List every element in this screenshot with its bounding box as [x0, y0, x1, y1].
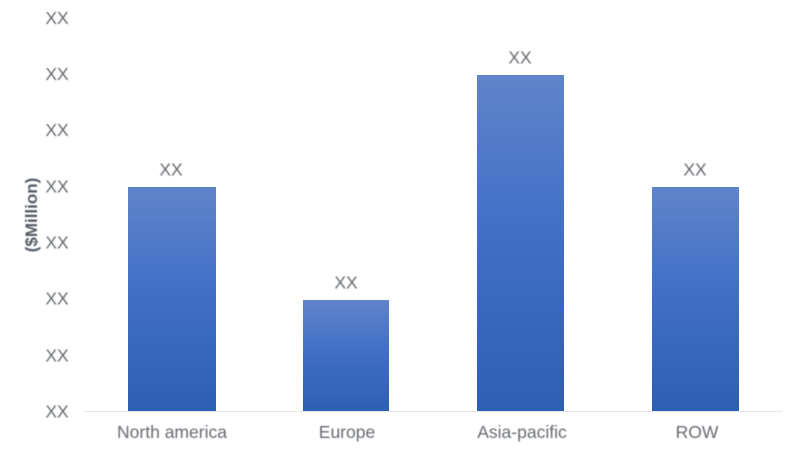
y-axis labels: XX	[45, 402, 69, 422]
y-axis labels	[45, 8, 69, 422]
bar: Asia-pacific	[477, 48, 567, 442]
x-axis line	[85, 410, 782, 412]
y-axis labels: XX	[45, 8, 69, 28]
y-axis labels: XX	[45, 288, 69, 308]
y-axis labels: XX	[45, 120, 69, 140]
y-axis labels: XX	[45, 232, 69, 252]
bar: Europe: Europe	[319, 422, 375, 442]
bar: Europe	[303, 272, 389, 442]
y-axis labels: XX	[45, 176, 69, 196]
bar: Asia-pacific: Asia-pacific	[477, 422, 567, 442]
y-axis title: ($Million)	[22, 178, 41, 252]
bar: North america: XX	[159, 160, 183, 180]
bar: North america	[117, 160, 227, 442]
bar: Europe: XX	[334, 272, 358, 292]
bar: North america: North america	[117, 422, 227, 442]
bar: ROW: ROW	[676, 422, 719, 442]
y-axis labels: XX	[45, 64, 69, 84]
y-axis labels: XX	[45, 346, 69, 366]
bar: Asia-pacific: XX	[508, 48, 532, 68]
bar: ROW: XX	[683, 160, 707, 180]
bar: ROW	[652, 160, 739, 442]
